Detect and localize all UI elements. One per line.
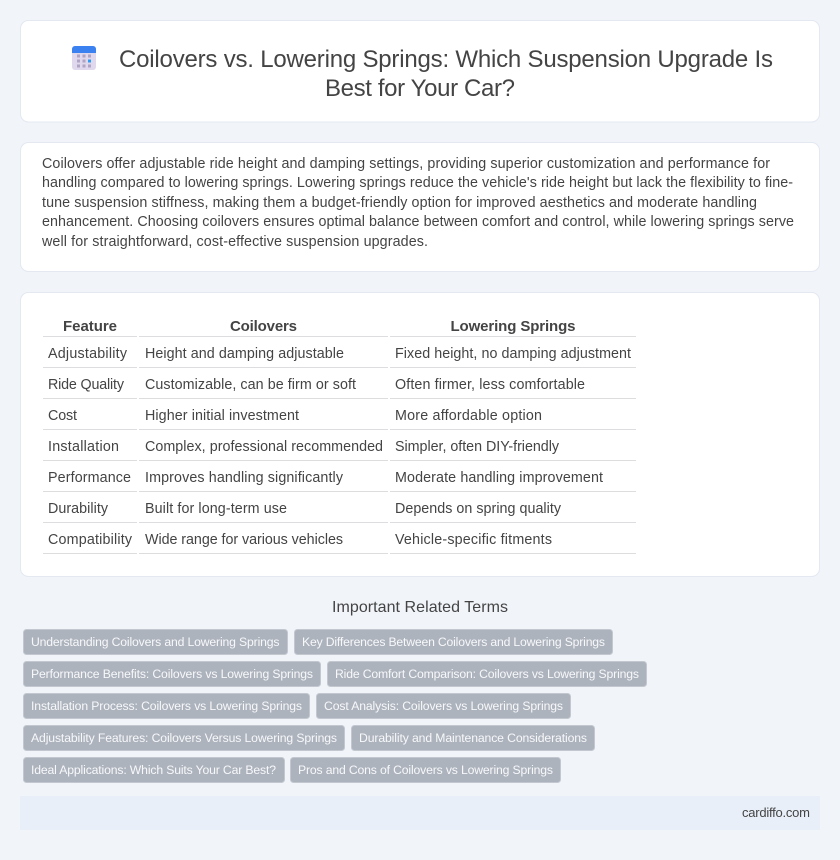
tag — [316, 694, 570, 718]
row: adjustability — [48, 346, 631, 362]
tag — [294, 630, 612, 654]
row: compatibility — [48, 532, 552, 548]
row: ride quality — [48, 377, 585, 393]
row: performance: Performance — [48, 470, 131, 486]
icon: calendar — [72, 46, 96, 70]
row: performance — [48, 470, 603, 486]
panel: header — [20, 20, 820, 122]
tag: Understanding Coilovers and Lowering Springs — [31, 635, 280, 649]
row: durability — [48, 501, 562, 517]
tag — [24, 630, 288, 654]
footer — [20, 796, 820, 830]
row: cost: More affordable option — [395, 408, 542, 424]
tag — [328, 662, 646, 686]
tag: Key Differences Between Coilovers and Lowering Springs — [302, 635, 605, 649]
row: compatibility: Compatibility — [48, 532, 133, 548]
tag: Pros and Cons of Coilovers vs Lowering Springs — [298, 763, 553, 777]
tag — [290, 758, 560, 782]
row: compatibility: Vehicle-specific fitments — [395, 532, 552, 548]
row: ride quality: Often firmer, less comfortable — [395, 377, 585, 393]
table header: Feature — [63, 318, 117, 335]
text block: summary: well for straightforward, cost-effective suspension upgrades. — [41, 234, 428, 250]
row: durability: Depends on spring quality — [395, 501, 562, 517]
tag — [24, 694, 310, 718]
table header: Lowering Springs — [450, 318, 576, 335]
text block: summary: tune suspension stiffness, making them a budget-friendly option for improved aesthetics and moderate handling — [42, 195, 757, 211]
tag: Ideal Applications: Which Suits Your Car Best? — [31, 763, 276, 777]
tag — [24, 758, 284, 782]
heading: related terms: Important Related Terms — [332, 599, 508, 616]
tag — [24, 726, 344, 750]
related term tags — [24, 630, 646, 782]
footer: cardiffo.com — [742, 805, 810, 820]
panel: summary — [20, 142, 820, 272]
row: performance: Moderate handling improvement — [395, 470, 603, 486]
row: cost: Higher initial investment — [145, 408, 299, 424]
tag: Adjustability Features: Coilovers Versus Lowering Springs — [31, 731, 337, 745]
tag: Cost Analysis: Coilovers vs Lowering Springs — [324, 699, 563, 713]
row: durability: Durability — [48, 501, 109, 517]
row: installation: Simpler, often DIY-friendly — [395, 439, 560, 455]
title: Best for Your Car? — [325, 75, 515, 102]
title: Coilovers vs. Lowering Springs: Which Suspension Upgrade Is — [119, 46, 773, 73]
tag — [24, 662, 320, 686]
tag: Ride Comfort Comparison: Coilovers vs Lowering Springs — [335, 667, 639, 681]
tag: Installation Process: Coilovers vs Lowering Springs — [31, 699, 302, 713]
row: durability: Built for long-term use — [145, 501, 287, 517]
row: adjustability: Fixed height, no damping adjustment — [395, 346, 631, 362]
text block: summary — [41, 156, 794, 250]
row: adjustability: Adjustability — [48, 346, 128, 362]
row: installation — [48, 439, 560, 455]
row: ride quality: Customizable, can be firm or soft — [145, 377, 356, 393]
row: installation: Installation — [48, 439, 119, 455]
row: ride quality: Ride Quality — [48, 377, 125, 393]
row: adjustability: Height and damping adjustable — [145, 346, 344, 362]
tag — [352, 726, 594, 750]
row: cost: Cost — [48, 408, 77, 424]
row: cost — [48, 408, 542, 424]
row: installation: Complex, professional recommended — [145, 439, 383, 455]
table header — [63, 318, 576, 335]
table header: Coilovers — [230, 318, 297, 335]
text block: summary: handling compared to lowering springs. Lowering springs reduce the vehicle's ride height but lack the flexibility to fine- — [42, 175, 793, 191]
tag: Durability and Maintenance Considerations — [359, 731, 587, 745]
row: compatibility: Wide range for various vehicles — [145, 532, 343, 548]
row: performance: Improves handling significantly — [145, 470, 344, 486]
title — [119, 46, 773, 102]
text block: summary: enhancement. Choosing coilovers ensures optimal balance between comfort and control, while lowering springs serve — [42, 214, 794, 230]
panel: comparison table — [20, 292, 820, 576]
text block: summary: Coilovers offer adjustable ride height and damping settings, providing superior customization and performance for — [42, 156, 770, 172]
tag: Performance Benefits: Coilovers vs Lowering Springs — [31, 667, 313, 681]
